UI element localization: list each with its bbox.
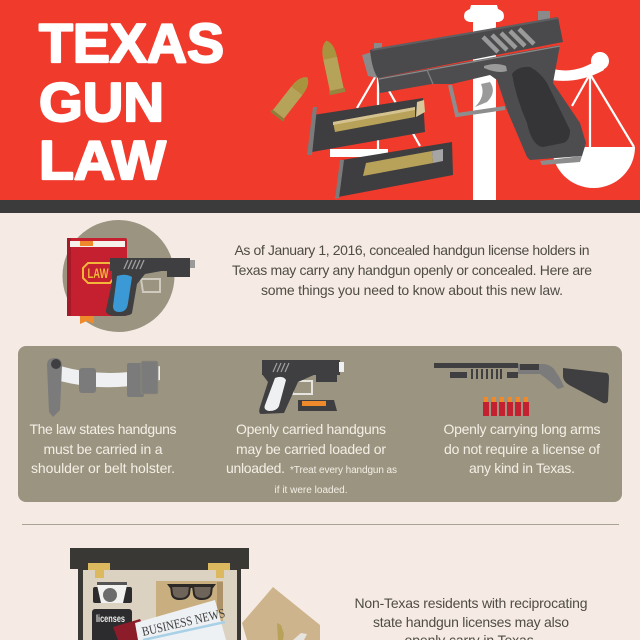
icon: licenses wallet: licenses (96, 614, 125, 625)
text block: long arms rule: do not require a license of (444, 441, 600, 457)
text block: introduction: some things you need to know about this new law. (261, 282, 563, 298)
text block: long arms rule (444, 421, 600, 476)
text block: loaded rule: Openly carried handguns (236, 421, 386, 437)
text block: loaded rule (226, 421, 397, 496)
text block: loaded rule: unloaded. (226, 460, 285, 476)
title: TEXAS (39, 12, 224, 74)
text block: loaded rule: if it were loaded. (274, 485, 348, 496)
text block: holster rule: must be carried in a (44, 441, 163, 457)
text block: non-residents: state handgun licenses may also (373, 614, 569, 630)
text block: holster rule (30, 421, 176, 476)
text block: non-residents: Non-Texas residents with reciprocating (354, 595, 588, 611)
icon: glasses (167, 584, 216, 599)
title: LAW (39, 129, 166, 191)
text block: non-residents (354, 595, 588, 640)
text block: introduction (232, 242, 592, 298)
title (39, 12, 224, 191)
panel: header banner (0, 0, 640, 213)
icon: passport (113, 619, 150, 640)
text block: loaded rule: *Treat every handgun as (290, 465, 397, 476)
text block: long arms rule: any kind in Texas. (469, 460, 575, 476)
icon: shotgun and shells (434, 363, 609, 416)
text block: holster rule: shoulder or belt holster. (31, 460, 175, 476)
icon: newspaper: BUSINESS NEWS (140, 605, 226, 639)
icon: lower magazine (335, 142, 453, 199)
icon: pistol (362, 11, 586, 165)
icon: small pistol (106, 258, 195, 316)
icon: scales of justice (330, 5, 635, 200)
icon: holster belt (47, 358, 160, 417)
icon: upper magazine (307, 98, 425, 155)
icon: camera (93, 582, 132, 603)
icon: licenses wallet (92, 609, 132, 640)
icon: pistol and magazine (259, 360, 344, 414)
icon: latches (88, 563, 230, 578)
text block: holster rule: The law states handguns (30, 421, 176, 437)
icon: bullets (270, 39, 345, 122)
text block: long arms rule: Openly carrying long arms (444, 421, 600, 437)
icon: law book: LAW (88, 265, 109, 281)
panel: carry rules (18, 346, 622, 502)
text block: introduction: As of January 1, 2016, concealed handgun license holders in (234, 242, 590, 258)
icon: envelope (242, 587, 320, 640)
title: GUN (39, 71, 164, 133)
text block: loaded rule: may be carried loaded or (236, 441, 386, 457)
text block: introduction: Texas may carry any handgun openly or concealed. Here are (232, 262, 592, 278)
icon: law book and pistol (62, 220, 195, 332)
icon: briefcase (70, 548, 249, 640)
icon: tan note (156, 581, 223, 621)
